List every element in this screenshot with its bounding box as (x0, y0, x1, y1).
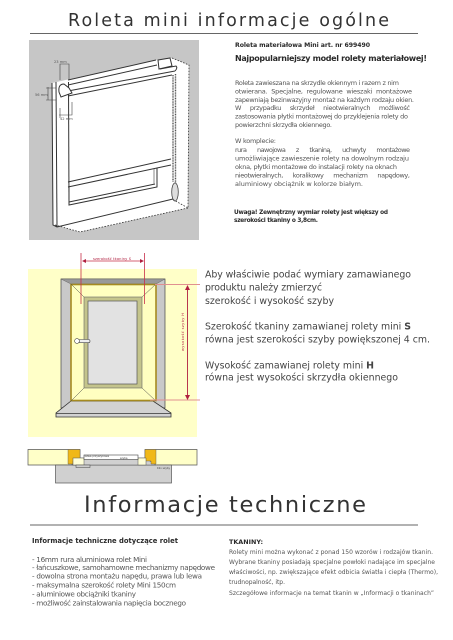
height dimension (150, 284, 200, 400)
product heading: Roleta materiałowa Mini art. nr 699490 (235, 42, 371, 49)
dimension marks: 56 mm (35, 93, 48, 97)
text block: technical information list: - maksymalna szerokość rolety Mini 150cm (32, 580, 176, 590)
text block: technical information list: - aluminiowe obciążniki tkaniny (32, 590, 137, 598)
text block: description: aluminiowy obciążnik w kolorze białym. (235, 180, 363, 188)
text block: fabrics: właściwości, np. zwiększające efekt odbicia światła i ciepła (Thermo), (229, 569, 438, 576)
text block: description: W komplecie: (235, 137, 276, 145)
width dimension: szerokość tkaniny S (93, 257, 132, 261)
callout: outer dimension note: Uwaga! Zewnętrzny wymiar rolety jest większy od (234, 210, 388, 216)
text block: description: otwierana. Specjalne, regulowane wieszaki montażowe (235, 88, 412, 96)
text block: fabrics: trudnopalność, itp. (229, 579, 285, 586)
text block: description: nieotwieralnych, koralikowy mechanizm napędowy, (235, 172, 410, 180)
panel: cross-section drawing (28, 450, 197, 483)
text block: fabrics (229, 538, 438, 597)
text block: fabrics: Rolety mini można wykonać z ponad 150 wzorów i rodzajów tkanin. (229, 549, 433, 556)
text block: technical information list: Informacje techniczne dotyczące rolet (32, 537, 179, 545)
text block: how to measure: produktu należy zmierzyć (205, 283, 322, 294)
text block: description: W przypadku skrzydeł nieotwieralnych możliwość (235, 104, 410, 112)
callout: outer dimension note: szerokości tkaniny o 3,8cm. (234, 217, 318, 224)
text block: description: zapewniają bezinwazyjny montaż na każdym rodzaju okien. (235, 96, 414, 104)
text block: description: rura nawojowa z tkaniną, uchwyty montażowe (235, 146, 410, 154)
text block: description: zastosowania płytki montażowej do przyklejenia rolety do (235, 112, 408, 120)
text block: technical information list: - łańcuszkowe, samohamowne mechanizmy napędowe (32, 563, 216, 572)
icon: bead chain (172, 74, 178, 201)
callout: outer dimension note (234, 210, 388, 224)
text block: how to measure: równa jest wysokości skrzydła okiennego (205, 373, 398, 384)
text block: technical information list: - dowolna strona montażu napędu, prawa lub lewa (32, 572, 202, 580)
text block: how to measure: szerokość i wysokość szyby (205, 296, 334, 307)
text block: how to measure: równa jest szerokości szyby powiększonej 4 cm. (205, 335, 430, 346)
text block: technical information list (32, 537, 216, 608)
panel: roller blind diagram (29, 40, 199, 240)
text block: fabrics: Wybrane tkaniny posiadają specjalne powłoki nadające im specjalne (229, 559, 435, 566)
text block: how to measure: Wysokość zamawianej rolety mini H (205, 360, 374, 371)
title: Roleta mini informacje ogolne: Roleta mini informacje ogólne (68, 11, 389, 31)
icon: window handle (75, 339, 90, 343)
panel: cross-section drawing: szyba (120, 456, 128, 460)
text block: description: okna, płytki montażowe do instalacji rolety na oknach (235, 163, 397, 171)
text block: technical information list: - możliwość zainstalowania napięcia bocznego (32, 598, 186, 608)
text block: how to measure: Szerokość tkaniny zamawianej rolety mini S (205, 321, 411, 332)
dimension marks: 42 mm (60, 117, 73, 121)
panel: cross-section drawing: listwa przyszybowa (84, 454, 110, 458)
dimension marks: 23 mm (54, 60, 67, 64)
dimension marks (35, 60, 73, 121)
panel: window measurement diagram (28, 253, 200, 437)
text block: technical information list: - 16mm rura aluminiowa rolet Mini (32, 555, 147, 564)
product heading: Najpopularniejszy model rolety materiałowej! (235, 54, 427, 63)
panel: cross-section drawing: Klin szyby (157, 466, 171, 470)
heading: Informacje techniczne: Informacje techniczne (84, 492, 366, 518)
width dimension (81, 253, 144, 304)
text block: description: powierzchni skrzydła okiennego. (235, 121, 332, 129)
text block: description: Roleta zawieszana na skrzydle okiennym i razem z nim (235, 79, 399, 87)
product heading (235, 42, 427, 63)
text block: how to measure: Aby właściwie podać wymiary zamawianego (205, 269, 411, 280)
text block: description (235, 79, 414, 188)
text block: how to measure (205, 269, 430, 384)
text block: fabrics: Szczegółowe informacje na temat tkanin w „Informacji o tkaninach” (229, 590, 434, 597)
text block: description: umożliwiające zawieszenie rolety na dowolnym rodzaju (235, 154, 409, 162)
text block: fabrics: TKANINY: (229, 538, 263, 546)
height dimension: wysokość szyby H (181, 313, 185, 351)
